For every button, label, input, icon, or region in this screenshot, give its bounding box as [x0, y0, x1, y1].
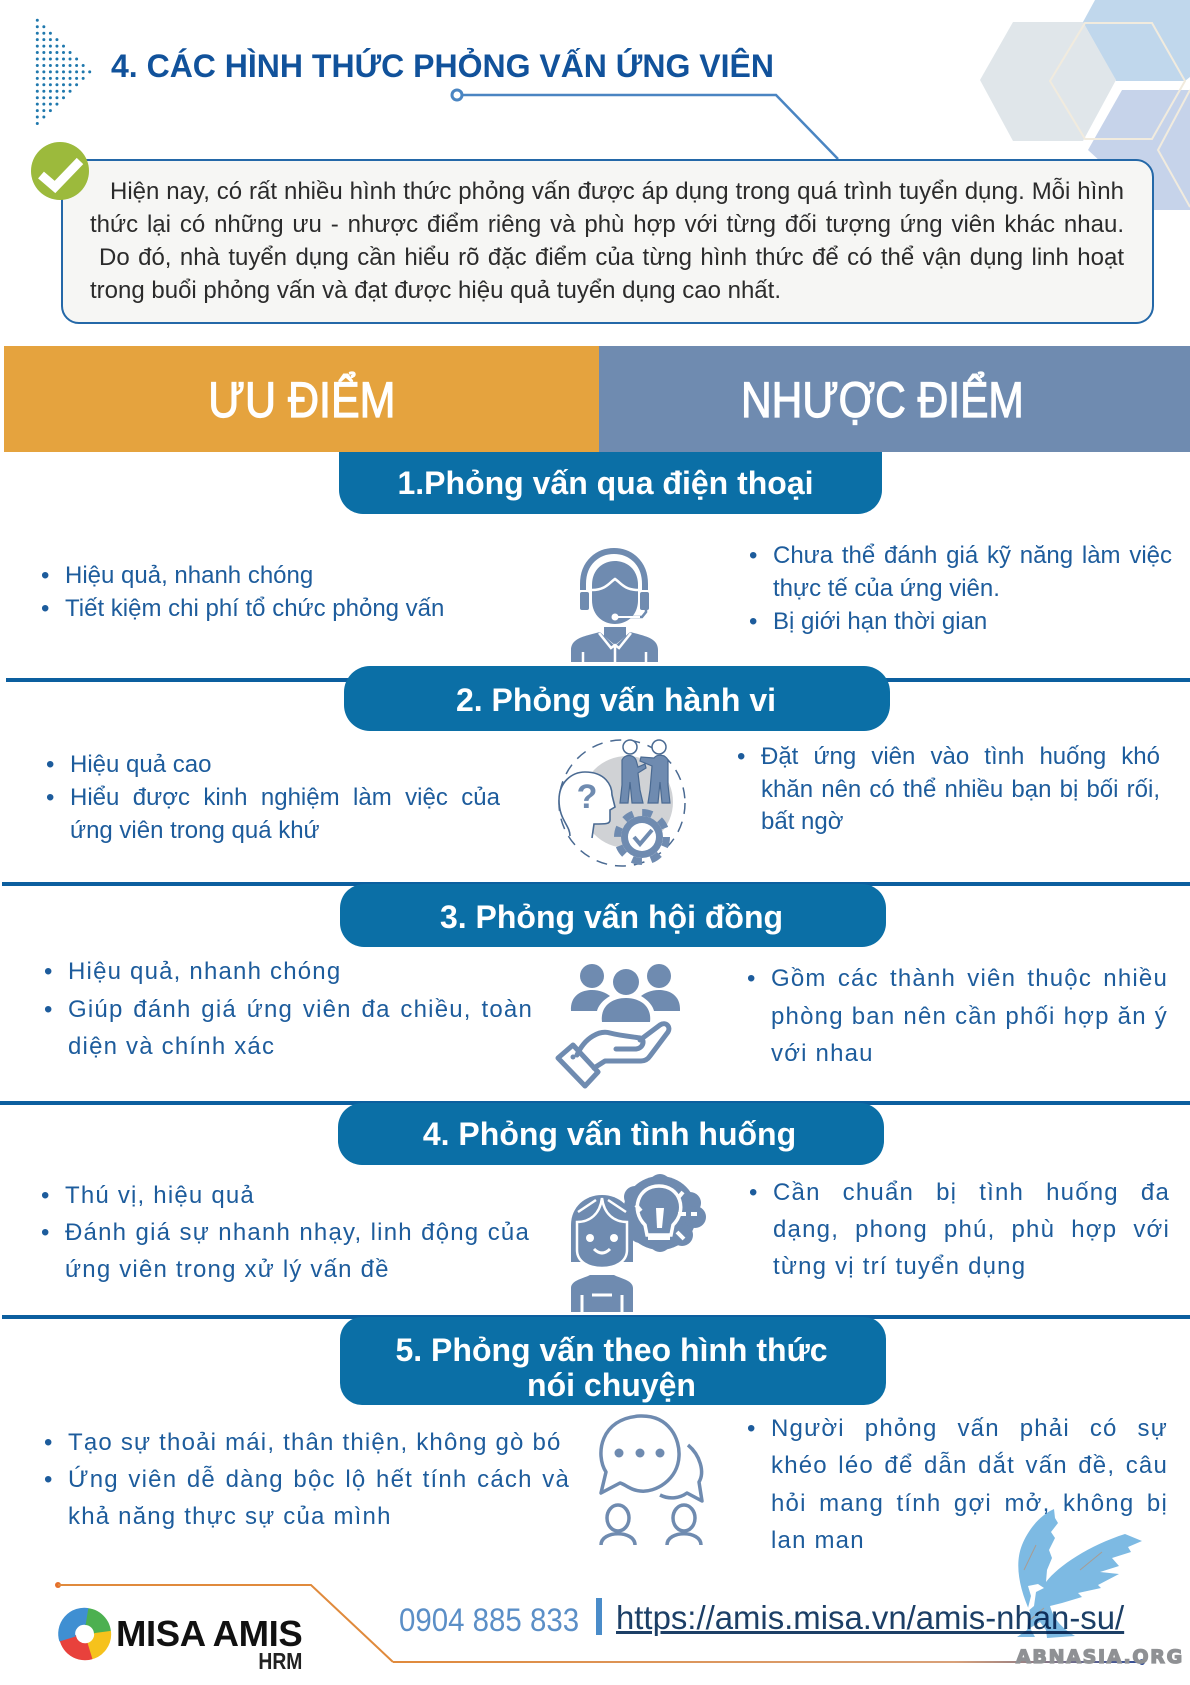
panel: introduction: Do đó, nhà tuyển dụng cần hiểu rõ đặc điểm của từng hình thức để có thể vận dụng linh hoạt	[99, 244, 1124, 271]
text: section 1 disadvantages	[749, 542, 1172, 635]
text: section 1 disadvantages: thực tế của ứng viên.	[773, 575, 1000, 602]
heading: section 3: 3. Phỏng vấn hội đồng	[440, 899, 783, 935]
text: section 4 advantages	[41, 1182, 530, 1283]
text: section 2 disadvantages: khăn nên có thể nhiều bạn bị bối rối,	[761, 776, 1160, 802]
text: section 2 disadvantages: Đặt ứng viên vào tình huống khó	[761, 743, 1160, 770]
panel: advantages banner: ƯU ĐIỂM	[208, 372, 395, 428]
text: section 5 disadvantages: lan man	[771, 1527, 865, 1554]
icon: dotted triangle	[36, 18, 92, 125]
text: section 3 advantages	[44, 958, 533, 1060]
text: logo wordmark	[116, 1613, 302, 1674]
text: section 4 advantages: •	[41, 1219, 51, 1246]
text: section 4 disadvantages	[749, 1179, 1170, 1280]
panel: introduction: thức lại có những ưu - nhược điểm riêng và phù hợp với từng đối tượng ứng viên khác nhau.	[90, 211, 1124, 238]
panel: introduction: Hiện nay, có rất nhiều hình thức phỏng vấn được áp dụng trong quá trình tuyển dụng. Mỗi hình	[110, 178, 1124, 205]
text: section 1 advantages: •	[41, 562, 49, 589]
text: section 1 advantages: Tiết kiệm chi phí tổ chức phỏng vấn	[65, 595, 444, 622]
text: section 5 disadvantages: Người phỏng vấn phải có sự	[771, 1415, 1168, 1442]
text: section 3 advantages: •	[44, 996, 54, 1022]
heading: section 1: 1.Phỏng vấn qua điện thoại	[397, 465, 814, 501]
icon: behaviour interview	[558, 739, 686, 867]
text: phone number: 0904 885 833	[399, 1602, 579, 1638]
panel: introduction	[61, 159, 1154, 324]
text: section 2 advantages: Hiệu quả cao	[70, 751, 211, 778]
text: section 1 disadvantages: •	[749, 542, 757, 569]
text: section 2 advantages: •	[46, 784, 54, 811]
callout connector line	[450, 88, 839, 159]
text: section 2 disadvantages: •	[737, 743, 745, 770]
text: section 3 advantages: diện và chính xác	[68, 1033, 275, 1060]
text: section 3 disadvantages: Gồm các thành viên thuộc nhiều	[771, 965, 1168, 992]
text: section 3 advantages: •	[44, 958, 54, 985]
text: section 3 disadvantages: phòng ban nên cần phối hợp ăn ý	[771, 1002, 1168, 1030]
text: section 2 disadvantages: bất ngờ	[761, 808, 843, 835]
text: section 4 advantages: Thú vị, hiệu quả	[65, 1182, 255, 1209]
text: section 3 disadvantages: với nhau	[771, 1040, 874, 1067]
text: section 5 disadvantages: •	[747, 1415, 757, 1442]
heading: section 4: 4. Phỏng vấn tình huống	[423, 1116, 796, 1152]
icon: woman with light bulb	[571, 1174, 706, 1312]
text: section 3 advantages: Giúp đánh giá ứng viên đa chiều, toàn	[68, 996, 533, 1022]
panel: introduction: trong buổi phỏng vấn và đạt được hiệu quả tuyển dụng cao nhất.	[90, 277, 781, 304]
heading: section 1	[339, 452, 882, 514]
text: section 5 advantages: khả năng thực sự của mình	[68, 1503, 392, 1530]
text: section 4 disadvantages: dạng, phong phú, phù hợp với	[773, 1216, 1170, 1243]
icon: people on a hand	[556, 964, 680, 1088]
footer line	[55, 1582, 1145, 1665]
decorative hexagons	[980, 0, 1190, 210]
text: section 1 advantages: •	[41, 595, 49, 622]
text: logo wordmark: MISA AMIS	[116, 1613, 302, 1654]
panel: disadvantages banner	[599, 346, 1190, 452]
heading: section 3	[340, 884, 886, 947]
text: section 5 advantages: •	[44, 1429, 54, 1456]
heading: section 4	[338, 1103, 884, 1165]
text: logo wordmark: HRM	[258, 1648, 302, 1674]
text: section 1 disadvantages: •	[749, 608, 757, 635]
text: section 2 advantages: Hiểu được kinh nghiệm làm việc của	[70, 784, 500, 811]
text: section 5 disadvantages: khéo léo để dẫn dắt vấn đề, câu	[771, 1452, 1168, 1479]
icon: behaviour interview: ?	[577, 778, 597, 816]
text: website: https://amis.misa.vn/amis-nhan-su/	[616, 1599, 1124, 1636]
text: section 5 advantages: Ứng viên dễ dàng bộc lộ hết tính cách và	[68, 1466, 570, 1493]
text: section 4 disadvantages: từng vị trí tuyển dụng	[773, 1253, 1026, 1280]
heading: section 5: 5. Phỏng vấn theo hình thức	[395, 1332, 828, 1368]
text: watermark: ABNASIA.ORG	[1016, 1646, 1184, 1668]
text: section 4 disadvantages: •	[749, 1179, 759, 1206]
text: section 5 advantages: •	[44, 1466, 54, 1493]
text: section 5 disadvantages	[747, 1415, 1168, 1554]
text: section 5 disadvantages: hỏi mang tính gợi mở, không bị	[771, 1490, 1168, 1517]
text: section 1 disadvantages: Bị giới hạn thời gian	[773, 608, 987, 635]
text: section 5 advantages: Tạo sự thoải mái, thân thiện, không gò bó	[68, 1429, 562, 1456]
text: section 1 disadvantages: Chưa thể đánh giá kỹ năng làm việc	[773, 542, 1172, 569]
text: section 4 advantages: ứng viên trong xử lý vấn đề	[65, 1256, 390, 1283]
text: section 5 advantages	[44, 1429, 570, 1530]
panel: advantages banner	[4, 346, 599, 452]
text: section 1 advantages	[41, 562, 444, 622]
heading: section 5: nói chuyện	[527, 1367, 696, 1403]
divider bar	[596, 1598, 602, 1635]
text: section 3 advantages: Hiệu quả, nhanh chóng	[68, 958, 341, 985]
text: section 2 advantages: ứng viên trong quá khứ	[70, 817, 320, 844]
icon: misa logo	[58, 1608, 112, 1660]
heading: section 5	[340, 1317, 886, 1405]
icon: chat bubbles and people	[599, 1414, 704, 1545]
text: section 4 disadvantages: Cần chuẩn bị tình huống đa	[773, 1179, 1170, 1206]
icon: headset agent	[571, 548, 658, 662]
heading: section 2	[344, 666, 890, 731]
text: section 3 disadvantages: •	[747, 965, 757, 992]
heading: section 2: 2. Phỏng vấn hành vi	[456, 682, 776, 718]
text: section 4 advantages: •	[41, 1182, 51, 1209]
text: section 4 advantages: Đánh giá sự nhanh nhạy, linh động của	[65, 1219, 530, 1246]
panel: disadvantages banner: NHƯỢC ĐIỂM	[741, 372, 1023, 428]
icon: green check	[31, 142, 89, 200]
text: section 2 disadvantages	[737, 743, 1160, 835]
text: section 2 advantages: •	[46, 751, 54, 778]
text: section 2 advantages	[46, 751, 500, 844]
text: section 3 disadvantages	[747, 965, 1168, 1067]
title: 4. CÁC HÌNH THỨC PHỎNG VẤN ỨNG VIÊN	[111, 48, 774, 84]
text: section 1 advantages: Hiệu quả, nhanh chóng	[65, 562, 313, 589]
icon: watermark bird	[1017, 1509, 1142, 1638]
